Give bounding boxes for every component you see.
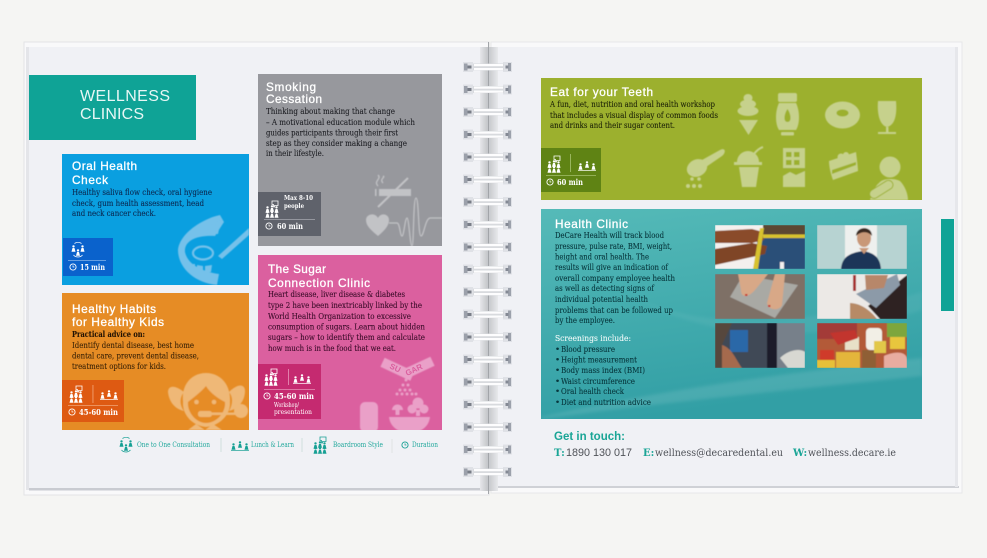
body text: height and oral health. The <box>555 252 649 262</box>
panel: smoking cessation <box>258 74 442 246</box>
title: Health Clinic <box>555 217 628 231</box>
badge: 15 min: 15 min <box>80 262 105 272</box>
photo: feet on scales <box>715 274 805 319</box>
contact details: wellness.decare.ie <box>808 448 896 459</box>
contact details: wellness@decaredental.eu <box>655 448 784 459</box>
book: left page <box>24 42 489 495</box>
title: Connection Clinic <box>268 276 370 290</box>
title: Eat for your Teeth <box>550 85 653 99</box>
contact details <box>554 447 896 459</box>
body text: overall company employee health <box>555 274 675 284</box>
screenings list: Blood pressure <box>561 345 615 355</box>
legend: boardroom style <box>314 437 383 454</box>
body text: Healthy saliva flow check, oral hygiene <box>72 188 212 198</box>
screenings list: Body mass index (BMI) <box>561 365 645 376</box>
photo: food selection <box>817 323 907 368</box>
body text: individual potential health <box>555 295 648 305</box>
screenings list: Waist circumference <box>561 377 635 387</box>
sachet label: GAR <box>404 362 424 378</box>
badge: 45-60 min workshop: Workshop/ <box>274 402 300 409</box>
side tab <box>941 219 954 311</box>
title <box>266 80 322 106</box>
contact heading: Get in touch: <box>554 431 625 443</box>
title: The Sugar <box>268 262 326 276</box>
art: no smoking and heartbeat <box>366 175 442 246</box>
title: Cessation <box>266 92 322 106</box>
title <box>72 302 164 329</box>
panel: wellness clinics heading <box>29 75 196 140</box>
body text: and drinks and their sugar content. <box>550 121 675 131</box>
screenings list: • <box>555 398 560 408</box>
panel: oral health check <box>62 154 249 285</box>
art: food and drink icons <box>684 93 908 200</box>
body text: by the employee. <box>555 316 615 326</box>
title <box>268 262 370 290</box>
badge: 60 min <box>541 148 601 192</box>
contact block <box>554 431 896 459</box>
panel: healthy habits <box>62 293 249 430</box>
body text: World Health Organization to excessive <box>268 312 411 322</box>
art: sugar sachet, can and bowl <box>360 357 435 432</box>
photo: medical examination <box>715 323 805 368</box>
title: for Healthy Kids <box>72 315 164 329</box>
book: right page <box>491 42 962 493</box>
panel: wellness clinics heading: WELLNESS <box>80 88 170 105</box>
art: mouth and dental mirror <box>178 215 249 285</box>
photo: man in navy polo <box>817 225 907 269</box>
body text: problems that can be followed up <box>555 306 673 316</box>
title: Check <box>72 173 108 187</box>
body text: – A motivational education module which <box>266 118 415 128</box>
contact details: 1890 130 017 <box>566 447 632 459</box>
body text <box>72 330 199 372</box>
body text: dental care, prevent dental disease, <box>72 352 199 362</box>
badge: 45-60 min workshop: 45-60 min <box>274 391 314 401</box>
body text: treatment options for kids. <box>72 362 166 372</box>
body text: Practical advice on: <box>72 330 145 340</box>
body text <box>266 107 415 159</box>
body text: A fun, diet, nutrition and oral health workshop <box>549 100 715 110</box>
panel: health clinic <box>541 209 922 419</box>
badge: 60 min: 60 min <box>557 177 583 187</box>
spiral binding <box>463 62 512 477</box>
legend: one to one: One to One Consultation <box>137 440 210 449</box>
body text <box>72 188 212 219</box>
screenings list: Diet and nutrition advice <box>561 398 651 408</box>
badge: 15 min <box>63 238 113 276</box>
panel: eat for your teeth <box>541 78 922 200</box>
contact details: T: <box>554 448 565 459</box>
badge: 45-60 min: 45-60 min <box>79 407 118 417</box>
panel: wellness clinics heading: CLINICS <box>80 106 144 123</box>
body text: results will give an indication of <box>555 263 669 273</box>
spine centre line <box>488 42 489 494</box>
screenings list: • <box>555 377 560 387</box>
badge: 45-60 min workshop: presentation <box>274 409 312 416</box>
spine gutter <box>480 47 498 491</box>
body text: in their lifestyle. <box>266 149 324 159</box>
sachet label <box>388 362 424 378</box>
legend <box>120 437 438 454</box>
screenings list: • <box>555 356 560 366</box>
body text: Thinking about making that change <box>266 107 395 117</box>
screenings list: • <box>555 366 560 376</box>
contact details: E: <box>643 448 654 459</box>
screenings list: Height measurement <box>561 356 637 366</box>
body text <box>555 231 675 326</box>
title <box>72 159 137 187</box>
badge: 60 min: people <box>284 203 304 210</box>
legend: duration: Duration <box>412 440 438 449</box>
body text: sugars – how to identify them and calculate <box>268 333 425 343</box>
photo: blood pressure check <box>817 274 907 319</box>
screenings list: • <box>555 387 560 397</box>
body text: consumption of sugars. Learn about hidden <box>268 322 425 332</box>
screenings list <box>555 334 651 408</box>
legend: lunch and learn <box>231 440 294 451</box>
badge: 60 min: 60 min <box>277 221 303 231</box>
title: Oral Health <box>72 159 137 173</box>
body text: that includes a visual display of common foods <box>550 111 718 121</box>
body text: check, gum health assessment, head <box>72 199 204 209</box>
body text: guides participants through their first <box>266 128 398 138</box>
body text: pressure, pulse rate, BMI, weight, <box>555 242 672 252</box>
panel: sugar connection clinic <box>258 255 442 432</box>
sachet label: SU <box>388 362 402 375</box>
body text: Heart disease, liver disease & diabetes <box>268 290 405 300</box>
body text: Identify dental disease, best home <box>72 341 194 351</box>
body text: as well as detecting signs of <box>555 284 655 294</box>
body text <box>549 100 718 131</box>
title: Smoking <box>266 80 316 94</box>
photo: waist measurement <box>715 225 805 269</box>
legend: one to one <box>120 437 210 452</box>
art: child brushing teeth <box>168 373 248 430</box>
badge: 45-60 min workshop <box>258 364 321 419</box>
legend: boardroom style: Boardroom Style <box>333 440 383 449</box>
body text: DeCare Health will track blood <box>555 231 664 241</box>
body text: and neck cancer check. <box>72 209 156 219</box>
badge: 60 min: Max 8-10 <box>284 195 313 202</box>
screenings list: • <box>555 345 560 355</box>
title: Healthy Habits <box>72 302 156 316</box>
contact details: W: <box>792 448 807 459</box>
legend: duration <box>402 440 438 449</box>
screenings list: Oral health check <box>561 387 625 397</box>
body text <box>268 290 425 354</box>
body text: how much is in the food that we eat. <box>268 344 396 354</box>
body text: type 2 have been inextricably linked by the <box>268 301 422 311</box>
legend: lunch and learn: Lunch & Learn <box>251 440 294 449</box>
screenings list: Screenings include: <box>555 334 631 344</box>
wave background <box>541 292 922 419</box>
badge: 60 min <box>258 192 321 236</box>
body text: step as they consider making a change <box>266 139 407 149</box>
badge: 45-60 min <box>62 380 124 422</box>
